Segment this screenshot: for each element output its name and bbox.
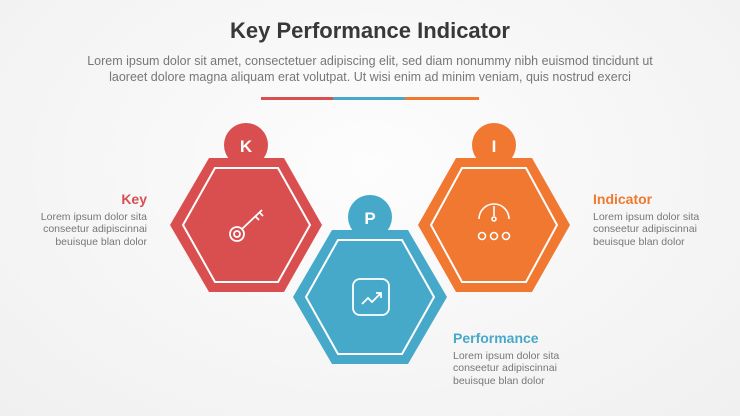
text: Performance: beuisque blan dolor (453, 375, 545, 387)
text: Indicator: Lorem ipsum dolor sita (593, 211, 699, 223)
text: Performance: Performance (453, 330, 539, 346)
hexagon: P (293, 195, 447, 364)
text: Performance (453, 330, 560, 387)
subtitle: Lorem ipsum dolor sit amet, consectetuer adipiscing elit, sed diam nonummy nibh euismod tincidunt ut laoreet dolore magna aliquam erat volutpat. Ut wisi enim ad minim veniam, quis nostrud exerci (87, 54, 653, 84)
text: Key (41, 191, 147, 248)
icon: gauge (478, 204, 510, 240)
text: Indicator: Indicator (593, 191, 652, 207)
icon: chart (353, 279, 389, 315)
text: Key: Key (121, 191, 147, 207)
text: Indicator: beuisque blan dolor (593, 236, 685, 248)
hexagon: I: I (492, 137, 496, 156)
hexagon: K: K (240, 137, 253, 156)
icon: key (230, 210, 263, 241)
divider (261, 97, 479, 100)
text: Performance: conseetur adipiscinnai (453, 362, 557, 374)
text: Key: conseetur adipiscinnai (43, 223, 147, 235)
hexagon: P: P (364, 209, 376, 228)
hexagon: I (418, 123, 570, 292)
hexagon: K (170, 123, 322, 292)
text: Performance: Lorem ipsum dolor sita (453, 350, 559, 362)
title: Key Performance Indicator (230, 18, 510, 43)
text: Indicator: conseetur adipiscinnai (593, 223, 697, 235)
text: Key: Lorem ipsum dolor sita (41, 211, 147, 223)
text: Key: beuisque blan dolor (55, 236, 147, 248)
text: Indicator (593, 191, 700, 248)
